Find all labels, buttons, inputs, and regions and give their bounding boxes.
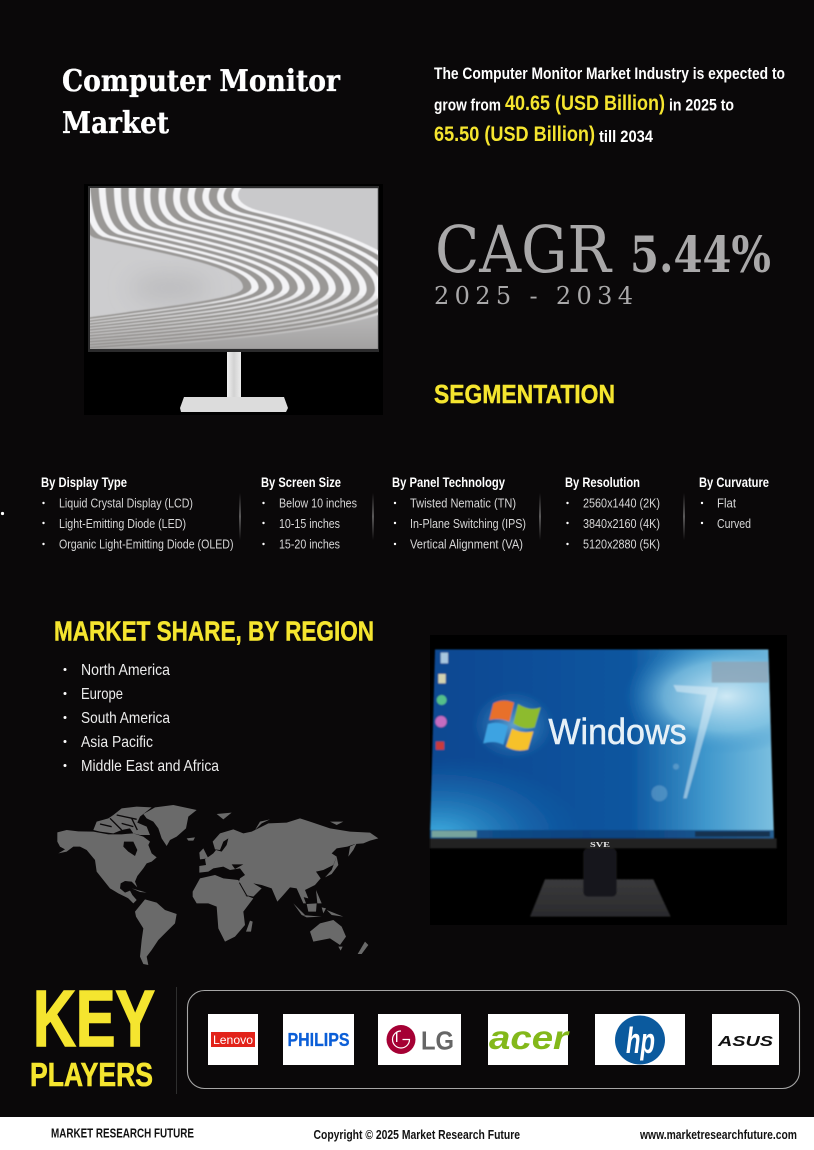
column: by panel technology: In-Plane Switching (IPS) [410,517,526,531]
column: by display type: By Display Type [41,475,127,490]
column: by screen size [261,475,357,552]
footer bar: MARKET RESEARCH FUTURE [51,1126,194,1140]
column: by resolution: By Resolution [565,475,640,490]
column: by curvature [699,475,769,531]
image: black monitor showing Windows 7: SVE [590,840,610,849]
key players heading: KEY [33,974,155,1063]
eurasia africa and oceania [193,813,378,954]
title: Market [62,106,169,141]
image: black monitor showing Windows 7 [428,635,787,925]
region list: North America [81,662,170,679]
logo: LG [378,1014,461,1065]
americas and greenland [57,805,197,965]
column: by display type: Organic Light-Emitting Diode (OLED) [59,538,234,552]
column: by resolution [565,475,660,552]
market share heading: MARKET SHARE, BY REGION [54,616,374,646]
region list: Asia Pacific [81,734,153,751]
column: by screen size: By Screen Size [261,475,341,490]
column: by panel technology [392,475,526,552]
column: by panel technology: By Panel Technology [392,475,505,490]
column: by display type: Liquid Crystal Display (LCD) [59,496,193,510]
column: by screen size: Below 10 inches [279,496,357,510]
region list: Middle East and Africa [81,758,219,775]
column: by resolution: 3840x2160 (4K) [583,517,660,531]
column: by resolution: 5120x2880 (5K) [583,538,660,552]
windows flag logo [483,701,541,751]
market size statement: grow from [434,96,501,114]
column: by panel technology: Vertical Alignment (VA) [410,538,523,552]
key players heading [30,974,155,1093]
footer bar: Copyright © 2025 Market Research Future [314,1127,520,1142]
region list [64,662,219,775]
world map [57,805,378,965]
footer bar [0,1117,814,1150]
title: Computer Monitor [62,64,341,99]
logo: Lenovo: Lenovo [213,1033,253,1047]
column: by panel technology: Twisted Nematic (TN) [410,496,516,510]
market size statement: 40.65 (USD Billion) [505,92,665,115]
logo: LG: LG [421,1026,454,1056]
column: by curvature: By Curvature [699,475,769,490]
segmentation table [41,475,769,552]
market size statement: 65.50 (USD Billion) [434,123,595,146]
column: by display type [41,475,234,552]
segmentation heading: SEGMENTATION [434,379,615,409]
column: by resolution: 2560x1440 (2K) [583,496,660,510]
logo: Asus [712,1014,779,1065]
market size statement: in 2025 to [669,96,734,114]
logo: Acer: acer [489,1019,571,1056]
market size statement [434,65,785,146]
logo: Acer [488,1014,571,1065]
logo: HP: hp [626,1020,655,1061]
region list: Europe [81,686,123,703]
image: black monitor showing Windows 7: Windows [548,711,687,752]
CAGR figure [434,213,771,310]
column: by screen size: 15-20 inches [279,538,340,552]
logo: Philips: PHILIPS [288,1029,350,1050]
CAGR figure: CAGR [435,213,613,288]
logo: Lenovo [208,1014,258,1065]
title [62,64,341,141]
column: by display type: Light-Emitting Diode (LED) [59,517,186,531]
key players logo panel [188,990,800,1088]
market size statement: till 2034 [599,128,654,146]
column: by curvature: Flat [717,496,736,510]
CAGR figure: 5.44% [630,225,771,284]
key players heading: PLAYERS [30,1056,153,1093]
logo: HP [595,1014,685,1065]
image: white monitor with wave wallpaper [84,184,383,415]
CAGR figure: 2025 - 2034 [434,282,633,310]
column: by curvature: Curved [717,517,751,531]
region list: South America [81,710,170,727]
logo: Philips [283,1014,354,1065]
logo: Asus: ASUS [717,1033,773,1050]
column: by screen size: 10-15 inches [279,517,340,531]
